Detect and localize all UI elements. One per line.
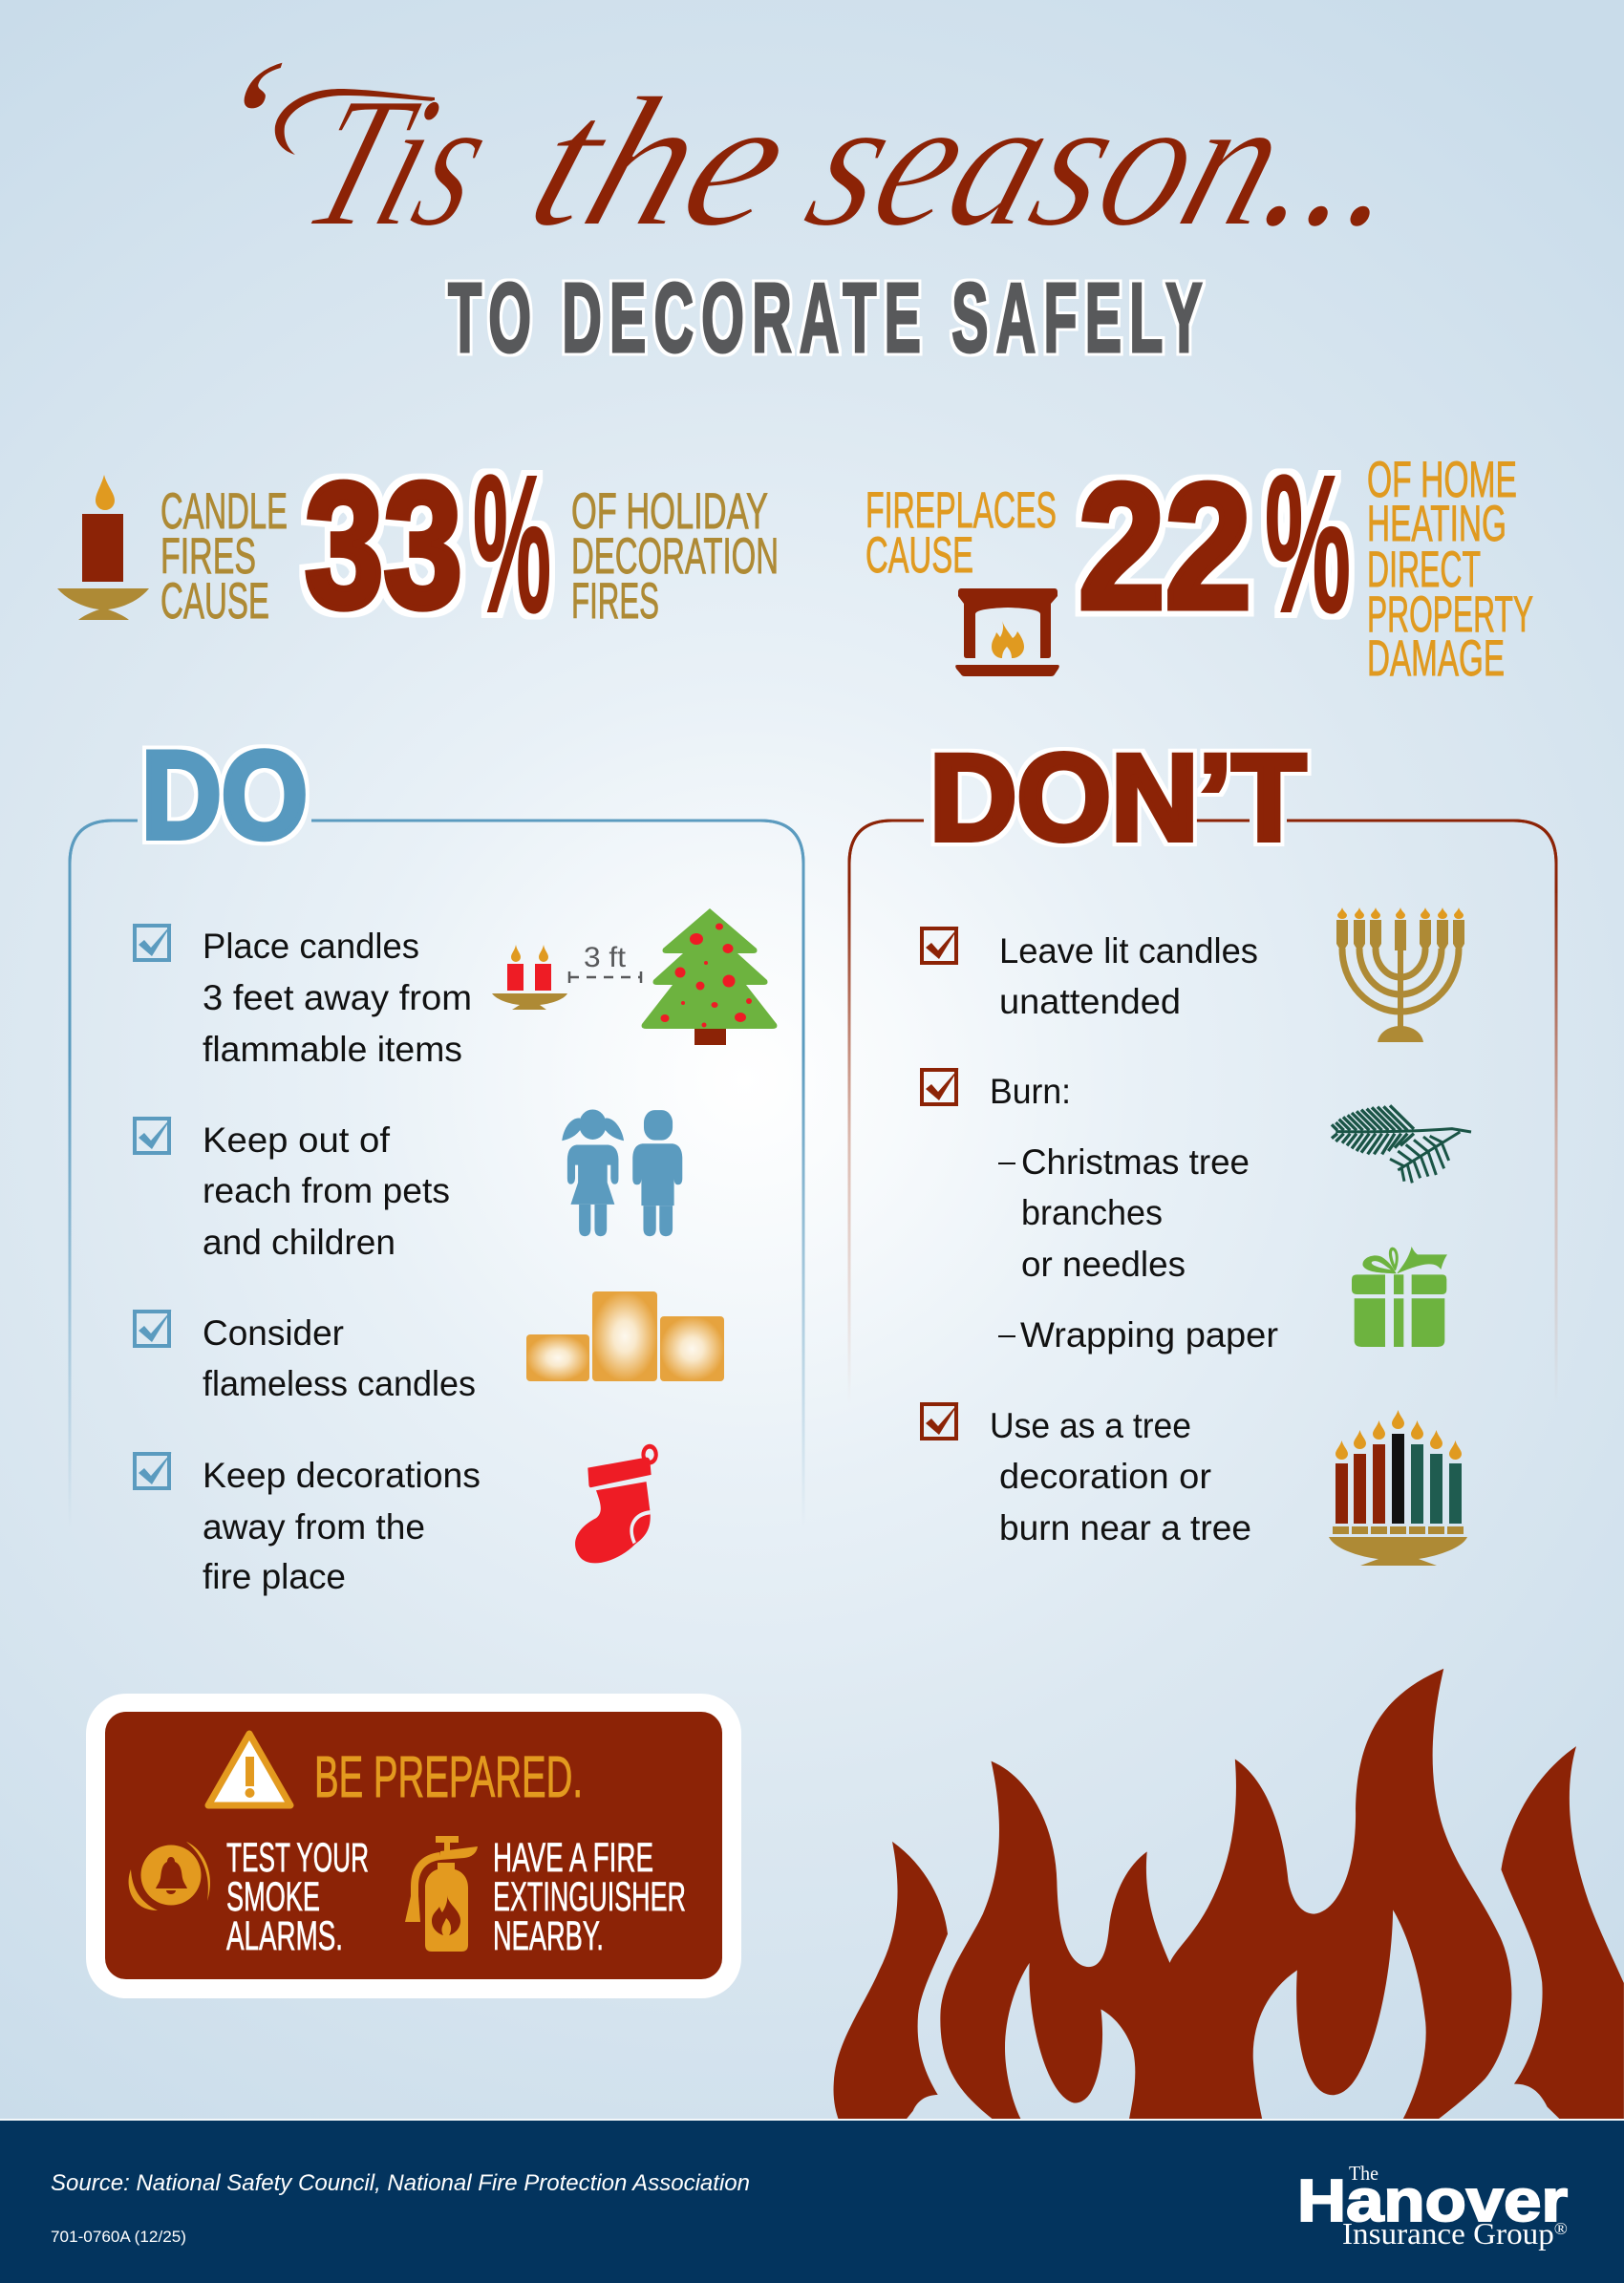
text: candle fires cause	[160, 483, 288, 629]
number: 22 percent	[1079, 435, 1351, 653]
icon: menorah	[1336, 907, 1464, 1042]
heading: do: DO	[141, 725, 308, 864]
text: Consider	[203, 1313, 344, 1353]
text: away from the	[203, 1507, 425, 1547]
text: reach from pets	[203, 1171, 450, 1210]
text: Leave lit candles	[999, 931, 1258, 971]
icon: fireplace	[955, 588, 1059, 676]
text: have a fire extinguisher nearby: HAVE A FIRE	[493, 1835, 653, 1881]
checkbox	[135, 924, 172, 960]
text: candle fires cause: FIRES	[160, 528, 256, 585]
item: place candles	[135, 908, 777, 1069]
text: of holiday decoration fires: FIRES	[571, 573, 659, 629]
item: keep out of reach	[135, 1109, 682, 1262]
logo: the hanover insurance group: Hanover	[1297, 2168, 1568, 2234]
item: flameless candles	[135, 1291, 724, 1403]
text: have a fire extinguisher nearby	[493, 1835, 686, 1959]
text: or needles	[1021, 1245, 1186, 1284]
text: of home heating direct property damage: DAMAGE	[1367, 630, 1505, 687]
panel: dont	[849, 730, 1556, 1566]
checkbox	[135, 1310, 172, 1346]
text: test your smoke alarms: ALARMS.	[226, 1913, 343, 1959]
icon: fire extinguisher	[405, 1836, 478, 1952]
stat: candle fires 33%: %	[473, 435, 551, 653]
title: script heading	[174, 20, 1436, 266]
item: burn	[922, 1068, 1471, 1355]
stat: fireplaces 22%: %	[1265, 435, 1351, 653]
text	[203, 1313, 476, 1403]
text: of home heating direct property damage	[1367, 452, 1533, 687]
text	[203, 927, 472, 1069]
icon: candles on dish	[492, 945, 567, 1010]
text	[999, 931, 1258, 1021]
title: script heading: season...	[786, 59, 1436, 266]
item: leave lit candles	[922, 907, 1464, 1042]
logo: the hanover insurance group	[1297, 2162, 1568, 2251]
icon: children	[562, 1109, 682, 1236]
text: flammable items	[203, 1030, 462, 1069]
text: have a fire extinguisher nearby: EXTINGUISHER	[493, 1874, 686, 1920]
logo: the hanover insurance group: Insurance Group	[1342, 2216, 1547, 2251]
text: candle fires cause: CANDLE	[160, 483, 288, 540]
text	[203, 1120, 450, 1262]
checkbox	[922, 1068, 959, 1104]
text: Keep decorations	[203, 1456, 481, 1495]
text: fire place	[203, 1557, 346, 1596]
subtitle: TO DECORATE SAFELY	[448, 262, 1203, 373]
text: of home heating direct property damage: DIRECT	[1367, 542, 1481, 598]
text: have a fire extinguisher nearby: NEARBY.	[493, 1913, 604, 1959]
logo: the hanover insurance group: ®	[1554, 2219, 1568, 2238]
text: fireplaces cause: CAUSE	[865, 527, 973, 584]
text: unattended	[999, 982, 1181, 1021]
label: 3 ft distance	[569, 942, 641, 983]
text: fireplaces cause	[865, 482, 1057, 584]
panel: do	[70, 725, 803, 1596]
icon: flameless candles	[526, 1291, 724, 1381]
footer band	[0, 2119, 1624, 2283]
text: Burn:	[990, 1072, 1071, 1111]
illustration: flames	[834, 1669, 1624, 2121]
heading: be prepared: BE PREPARED.	[314, 1744, 583, 1809]
text: of holiday decoration fires: OF HOLIDAY	[571, 483, 768, 540]
text: Wrapping paper	[1020, 1315, 1278, 1355]
item: keep decorations away	[135, 1446, 656, 1596]
text: of home heating direct property damage: HEATING	[1367, 496, 1506, 552]
title: script heading: the	[508, 59, 814, 266]
checkbox	[922, 927, 959, 963]
text: Keep out of	[203, 1120, 391, 1160]
text: of home heating direct property damage: OF HOME	[1367, 452, 1517, 508]
text: Place candles	[203, 927, 419, 966]
title: script heading: ‘	[174, 20, 303, 226]
icon: smoke alarm	[129, 1842, 210, 1910]
stat: fireplaces 22%	[865, 435, 1533, 687]
text: burn near a tree	[999, 1508, 1251, 1547]
logo: the hanover insurance group: The	[1349, 2162, 1378, 2185]
heading: dont: DON’T	[930, 730, 1306, 866]
item: use as tree decoration	[922, 1402, 1467, 1566]
icon: warning triangle	[208, 1734, 290, 1805]
icon: stocking	[575, 1446, 656, 1563]
text: 3 feet away from	[203, 978, 472, 1017]
text: test your smoke alarms: SMOKE	[226, 1874, 320, 1920]
source note: Source: National Safety Council, National Fire Protection Association	[51, 2170, 750, 2196]
text: test your smoke alarms: TEST YOUR	[226, 1835, 369, 1881]
text: Christmas tree	[1021, 1142, 1250, 1182]
text: Use as a tree	[990, 1406, 1191, 1445]
text: flameless candles	[203, 1364, 476, 1403]
panel: be prepared	[86, 1694, 741, 1998]
checkbox	[135, 1452, 172, 1488]
icon: kinara	[1329, 1410, 1467, 1566]
icon: gift	[1352, 1247, 1447, 1347]
checkbox	[135, 1117, 172, 1153]
text	[990, 1406, 1251, 1547]
document code: 701-0760A (12/25)	[51, 2228, 186, 2246]
text: and children	[203, 1223, 395, 1262]
text: of holiday decoration fires: DECORATION	[571, 528, 779, 585]
icon: christmas tree	[642, 908, 777, 1045]
text: test your smoke alarms	[226, 1835, 369, 1959]
icon: candle	[57, 475, 149, 620]
label: 3 ft distance: 3 ft	[584, 942, 627, 973]
number: 33 percent: 33	[305, 447, 462, 645]
text	[990, 1072, 1278, 1355]
text	[203, 1456, 481, 1596]
stat: candle fires 33%	[57, 435, 779, 653]
text: branches	[1021, 1193, 1163, 1232]
text: decoration or	[999, 1457, 1211, 1496]
text: fireplaces cause: FIREPLACES	[865, 482, 1057, 539]
checkbox	[922, 1402, 959, 1439]
icon: pine branch	[1332, 1105, 1471, 1183]
title: script heading: Tis	[285, 59, 514, 266]
text: candle fires cause: CAUSE	[160, 573, 269, 629]
number: 22 percent: 22	[1079, 448, 1251, 646]
text: of holiday decoration fires	[571, 483, 779, 629]
